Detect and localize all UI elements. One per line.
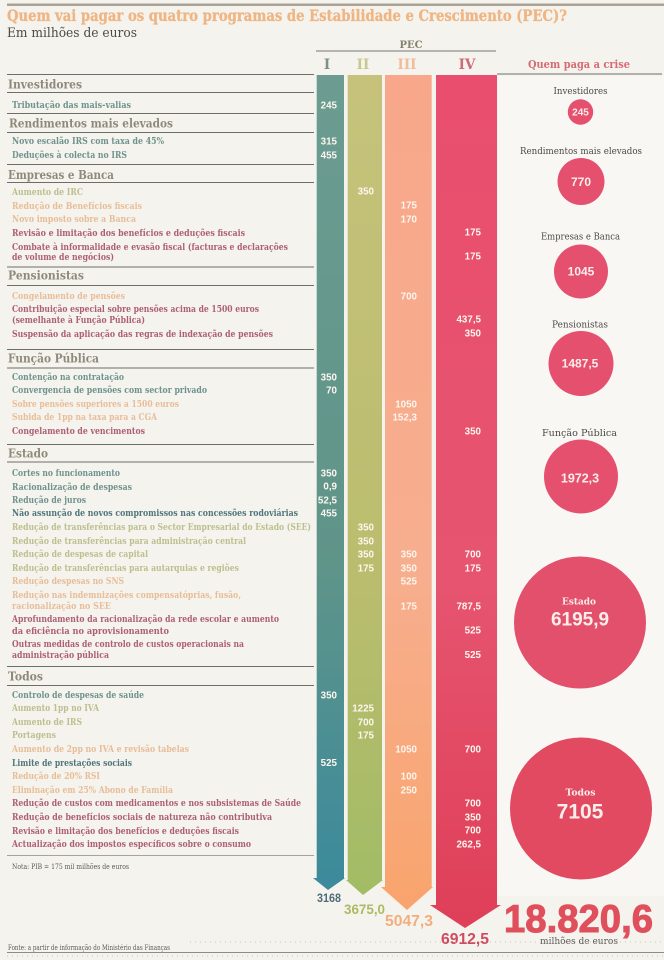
column I arrow <box>313 75 345 890</box>
section: Empresas e Banca: Novo imposto sobre a Banca <box>12 214 136 225</box>
values: column I: 525 <box>321 758 338 769</box>
values: column III: 170 <box>401 214 418 226</box>
bubble: Função Pública: Função Pública <box>542 428 617 439</box>
column II arrow <box>346 75 383 895</box>
values: column I: 315 <box>321 136 338 148</box>
values: column II: 175 <box>358 564 375 574</box>
values: column I: 70 <box>326 386 338 396</box>
section: Estado: Redução de despesas de capital <box>12 549 148 560</box>
source: Fonte: a partir de informação do Ministério das Finanças <box>8 943 170 952</box>
values: column I: 350 <box>321 372 338 384</box>
section: Rendimentos mais elevados: Novo escalão IRS com taxa de 45% <box>12 136 164 147</box>
section: Todos: Eliminação em 25% Abono de Família <box>12 785 173 796</box>
bubble: Empresas e Banca <box>541 232 620 298</box>
section: Estado: Redução nas indemnizações compensatóprias, fusão, <box>12 590 241 601</box>
column headers <box>316 40 496 73</box>
section: Todos: Todos <box>8 668 43 684</box>
values: column III: 100 <box>401 772 418 782</box>
values: column I: 455 <box>321 508 338 520</box>
section: Todos: Redução de custos com medicamentos e nos subsistemas de Saúde <box>12 798 301 809</box>
section: Investidores: Tributação das mais-valias <box>12 100 131 111</box>
total: column I: 3168 <box>317 893 342 905</box>
section: Empresas e Banca: Combate à informalidade e evasão fiscal (facturas e declarações <box>12 242 288 253</box>
values: column I: 350 <box>321 690 338 702</box>
bubble: Rendimentos mais elevados: 770 <box>571 175 591 189</box>
bubble: Estado: 6195,9 <box>551 610 609 630</box>
values: column IV: 350 <box>465 328 482 340</box>
section: Função Pública <box>8 350 207 437</box>
values: column IV: 175 <box>465 228 482 238</box>
bubble: Investidores: Investidores <box>554 86 608 97</box>
values: column III: 175 <box>401 200 418 212</box>
section: Todos <box>8 668 301 850</box>
values: column IV: 700 <box>465 798 482 810</box>
section: Função Pública: Contenção na contratação <box>12 372 124 383</box>
values: column IV: 700 <box>465 550 482 560</box>
section: Pensionistas: Congelamento de pensões <box>12 291 125 302</box>
values: column IV: 350 <box>465 426 482 438</box>
section: Pensionistas: Suspensão da aplicação das regras de indexação de pensões <box>12 329 273 340</box>
values: column III <box>392 200 418 796</box>
section: Função Pública: Subida de 1pp na taxa para a CGA <box>12 412 158 423</box>
values: column III: 1050 <box>395 744 418 756</box>
values: column II: 1225 <box>352 704 375 714</box>
values: column III: 350 <box>401 550 418 560</box>
values: column I: 455 <box>321 150 338 162</box>
section: Estado: Redução de transferências para o Sector Empresarial do Estado (SEE) <box>12 522 311 533</box>
section: Empresas e Banca <box>8 167 288 263</box>
section: Estado: Redução de juros <box>12 495 86 506</box>
section: Estado: Redução de transferências para administração central <box>12 536 246 547</box>
section: Rendimentos mais elevados <box>9 116 173 161</box>
section: Estado: Redução despesas no SNS <box>12 576 124 587</box>
total: column IV: 6912,5 <box>441 931 489 948</box>
bubble: Função Pública <box>542 428 618 514</box>
section: Função Pública: Sobre pensões superiores a 1500 euros <box>12 399 179 410</box>
values: column II <box>352 186 375 742</box>
section: Empresas e Banca: Aumento de IRC <box>11 187 83 198</box>
values: column IV <box>456 228 482 850</box>
section: Empresas e Banca: Redução de Benefícios fiscais <box>12 201 142 212</box>
section: Todos: Revisão e limitação dos benefícios e deduções fiscais <box>12 826 239 837</box>
section: Estado: Outras medidas de controlo de custos operacionais na <box>12 639 244 650</box>
bubble: Estado <box>514 556 646 688</box>
values: column III: 1050 <box>395 400 418 410</box>
section: Estado: Estado <box>8 446 48 460</box>
bubble: Pensionistas: Pensionistas <box>552 320 608 330</box>
values: column I: 0,9 <box>323 482 338 492</box>
values: column III: 250 <box>401 786 418 796</box>
values: column IV: 262,5 <box>456 840 482 850</box>
section: Estado: administração pública <box>12 650 109 661</box>
bubble: Investidores: 245 <box>572 108 589 118</box>
column headers: III <box>398 57 416 73</box>
values: column II: 700 <box>358 718 375 728</box>
bubble: Função Pública: 1972,3 <box>561 472 599 486</box>
right column heading: Quem paga a crise <box>528 58 630 71</box>
values: column IV: 525 <box>465 626 482 636</box>
bubble: Todos <box>510 738 652 880</box>
section: Estado: Redução de transferências para autarquias e regiões <box>12 563 239 574</box>
bubble: Todos: 7105 <box>557 800 604 824</box>
values: column III: 152,3 <box>392 412 418 424</box>
section: Todos: Limite de prestações sociais <box>12 758 132 769</box>
section: Todos: Actualização dos impostos específicos sobre o consumo <box>11 839 251 850</box>
section: Função Pública: Congelamento de vencimentos <box>12 426 145 437</box>
values: column III: 525 <box>401 576 418 588</box>
column headers: I <box>324 57 330 73</box>
section: Estado: Não assunção de novos compromissos nas concessões rodoviárias <box>12 508 298 519</box>
section: Investidores <box>8 76 131 111</box>
bubble: Empresas e Banca: 1045 <box>568 264 595 278</box>
values: column I: 245 <box>321 100 338 112</box>
section: Estado: Racionalização de despesas <box>12 482 132 493</box>
section: Todos: Aumento 1pp no IVA <box>11 703 100 714</box>
section: Estado <box>8 446 311 661</box>
section: Pensionistas: (semelhante à Função Pública) <box>12 315 145 326</box>
bubble: Empresas e Banca: Empresas e Banca <box>541 232 620 242</box>
section: Investidores: Investidores <box>8 76 82 92</box>
section: Função Pública: Convergencia de pensões com sector privado <box>12 385 207 396</box>
section: Pensionistas: Pensionistas <box>8 268 84 282</box>
section: Rendimentos mais elevados: Rendimentos mais elevados <box>9 116 173 130</box>
values: column IV: 787,5 <box>456 602 482 612</box>
column headers: PEC <box>399 40 423 51</box>
section: Pensionistas: Contribuição especial sobre pensões acima de 1500 euros <box>12 304 259 315</box>
section: Estado: Cortes no funcionamento <box>12 468 120 479</box>
values: column III: 350 <box>401 564 418 574</box>
bubble: Investidores <box>554 86 608 125</box>
section: Função Pública: Função Pública <box>8 350 99 366</box>
bubble: Estado: Estado <box>562 596 596 608</box>
values: column IV: 175 <box>465 252 482 262</box>
values: column II: 350 <box>358 536 375 548</box>
values: column I: 350 <box>321 468 338 480</box>
values: column I <box>318 100 338 769</box>
section: Estado: Aprofundamento da racionalização da rede escolar e aumento <box>11 614 279 625</box>
bubble: Rendimentos mais elevados <box>520 146 642 205</box>
bubble: Todos: Todos <box>566 788 596 798</box>
bubble: Pensionistas: 1487,5 <box>562 356 599 370</box>
values: column IV: 350 <box>465 812 482 824</box>
values: column IV: 700 <box>465 826 482 836</box>
column headers: II <box>357 57 369 73</box>
values: column I: 52,5 <box>318 496 338 506</box>
total: column II: 3675,0 <box>344 902 385 917</box>
grand total unit: milhões de euros <box>540 936 618 947</box>
values: column II: 175 <box>358 730 375 742</box>
section: Empresas e Banca: Empresas e Banca <box>8 167 114 182</box>
column headers: IV <box>459 57 476 73</box>
note: Nota: PIB = 175 mil milhões de euros <box>12 862 129 871</box>
values: column IV: 525 <box>465 650 482 661</box>
values: column III: 700 <box>401 292 418 302</box>
section: Todos: Redução de benefícios sociais de natureza não contributiva <box>12 812 272 823</box>
section: Pensionistas <box>8 268 273 340</box>
section: Estado: racionalização no SEE <box>12 601 111 612</box>
column III arrow <box>381 75 433 910</box>
section: Todos: Portagens <box>12 730 56 741</box>
values: column II: 350 <box>358 550 375 560</box>
section: Empresas e Banca: Revisão e limitação dos benefícios e deduções fiscais <box>12 228 245 239</box>
column IV arrow <box>430 75 501 928</box>
bubble: Pensionistas <box>548 320 614 396</box>
section: Rendimentos mais elevados: Deduções à colecta no IRS <box>12 150 127 161</box>
total: column III: 5047,3 <box>385 913 433 930</box>
section: Todos: Aumento de 2pp no IVA e revisão tabelas <box>11 744 189 755</box>
section: Empresas e Banca: de volume de negócios) <box>12 252 114 263</box>
section: Estado: da eficiência no aprovisionamento <box>12 626 169 637</box>
section: Todos: Aumento de IRS <box>11 717 82 728</box>
values: column II: 350 <box>358 186 375 198</box>
subtitle: Em milhões de euros <box>7 26 137 41</box>
values: column II: 350 <box>358 522 375 534</box>
values: column III: 175 <box>401 602 418 612</box>
section: Todos: Controlo de despesas de saúde <box>12 690 144 701</box>
grand total: 18.820,6 <box>504 898 653 941</box>
values: column IV: 175 <box>465 564 482 574</box>
bubble: Rendimentos mais elevados: Rendimentos mais elevados <box>520 146 642 157</box>
values: column IV: 437,5 <box>456 314 482 326</box>
values: column IV: 700 <box>465 744 482 756</box>
section: Todos: Redução de 20% RSI <box>12 771 100 782</box>
